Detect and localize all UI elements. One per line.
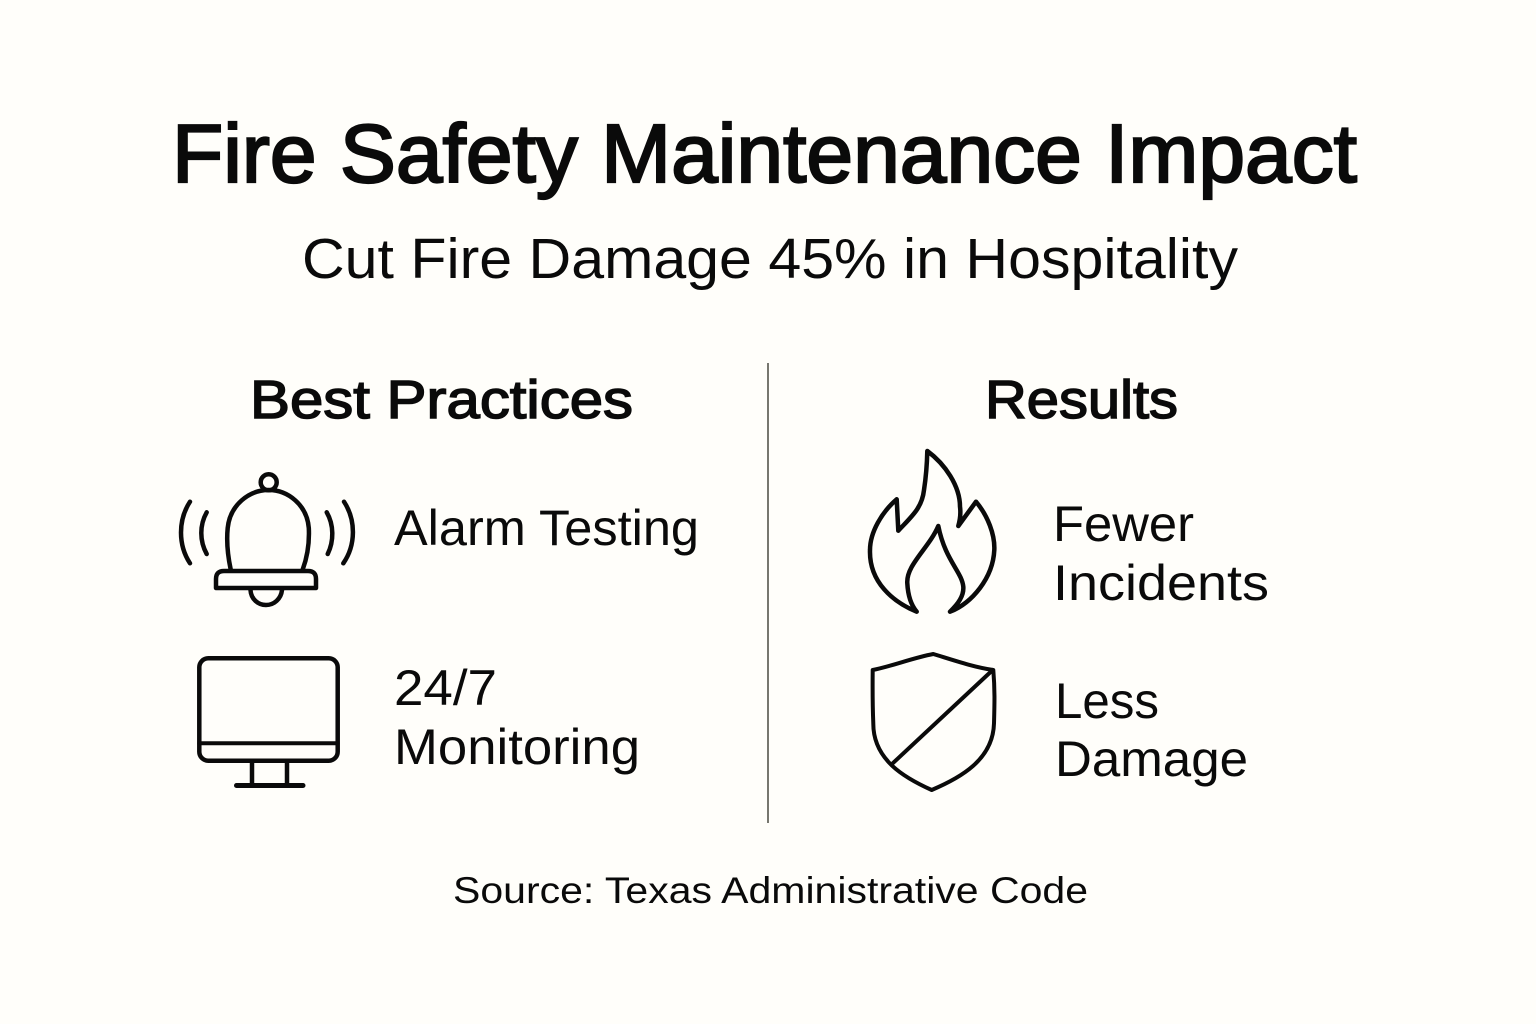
panel: results (870, 370, 1269, 790)
icon: ringing alarm bell (181, 474, 353, 605)
label: 24/7 monitoring: Monitoring (394, 719, 640, 775)
label: alarm testing: Alarm Testing (394, 500, 699, 556)
icon: shield (873, 654, 994, 790)
heading: results: Results (985, 370, 1178, 430)
subtitle: Cut Fire Damage 45% in Hospitality (302, 227, 1239, 291)
icon: monitor (199, 658, 338, 786)
source note: Source: Texas Administrative Code (453, 870, 1088, 911)
icon: flame (870, 451, 994, 612)
label: fewer incidents: Fewer (1053, 496, 1194, 552)
panel: best practices (181, 370, 699, 786)
center divider (767, 363, 769, 823)
label: less damage: Less (1055, 673, 1159, 729)
label: fewer incidents: Incidents (1053, 555, 1269, 611)
label: less damage (1055, 673, 1248, 787)
heading: best practices: Best Practices (250, 370, 633, 430)
label: less damage: Damage (1055, 731, 1248, 787)
label: 24/7 monitoring (394, 660, 640, 775)
label: 24/7 monitoring: 24/7 (394, 660, 497, 716)
label: fewer incidents (1053, 496, 1269, 611)
title: Fire Safety Maintenance Impact (172, 107, 1357, 200)
